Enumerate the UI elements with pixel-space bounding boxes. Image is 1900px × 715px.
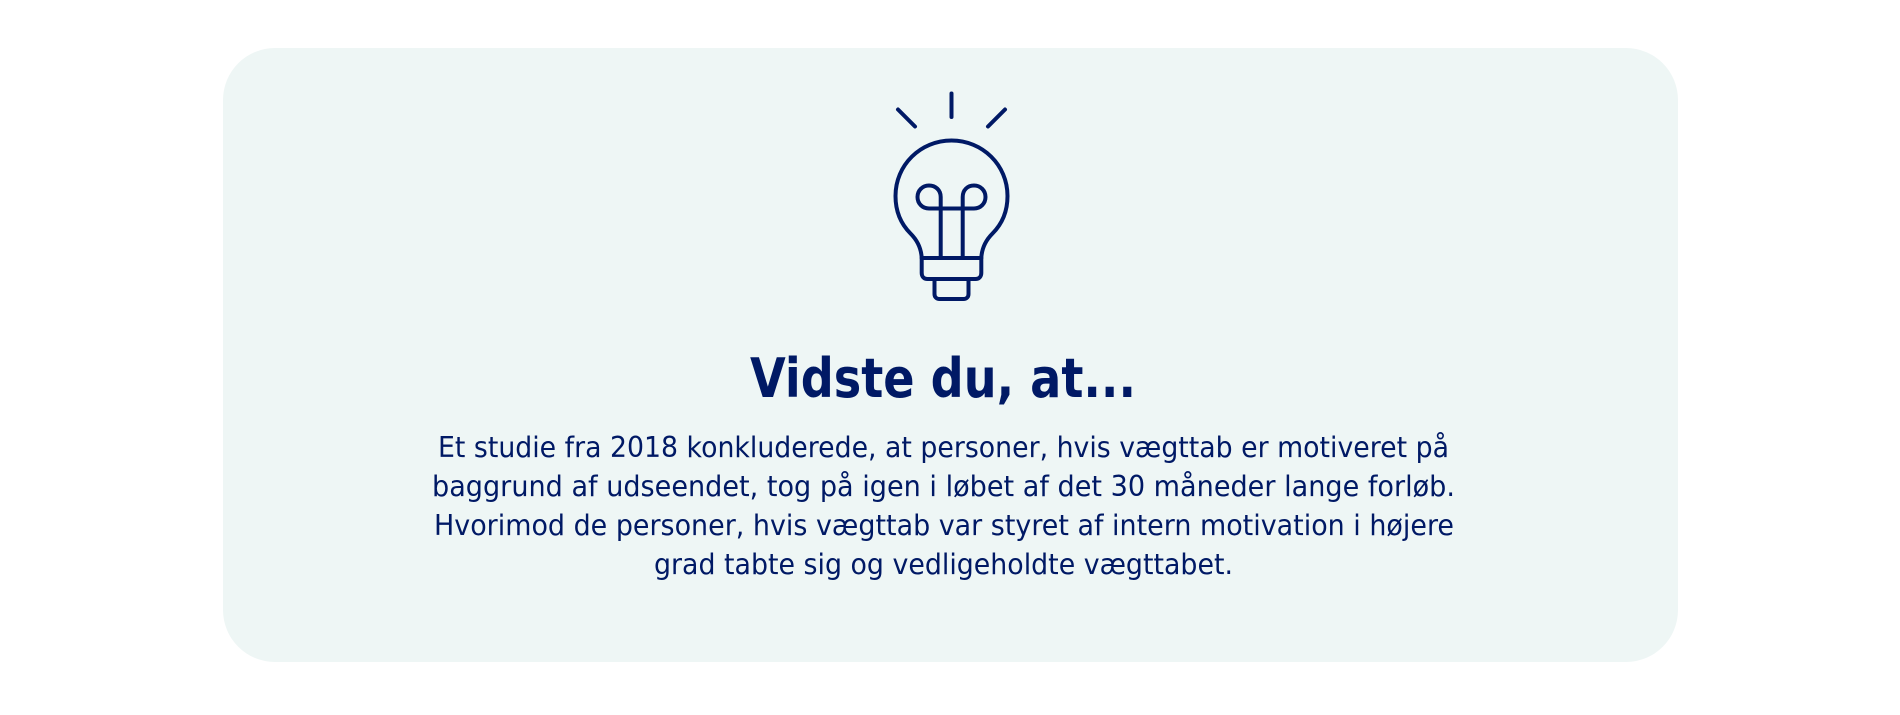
text block: study summary: Hvorimod de personer, hvis vægttab var styret af intern motivation i højere — [434, 509, 1454, 542]
text block: study summary: grad tabte sig og vedligeholdte vægttabet. — [654, 548, 1233, 581]
text block: study summary — [432, 431, 1455, 581]
heading: Vidste du, at... — [750, 347, 1136, 410]
text block: study summary: baggrund af udseendet, tog på igen i løbet af det 30 måneder lange forløb. — [432, 470, 1455, 503]
text block: study summary: Et studie fra 2018 konkluderede, at personer, hvis vægttab er motiveret på — [438, 431, 1449, 464]
panel: fact background — [223, 48, 1678, 662]
icon: light bulb — [896, 94, 1008, 299]
